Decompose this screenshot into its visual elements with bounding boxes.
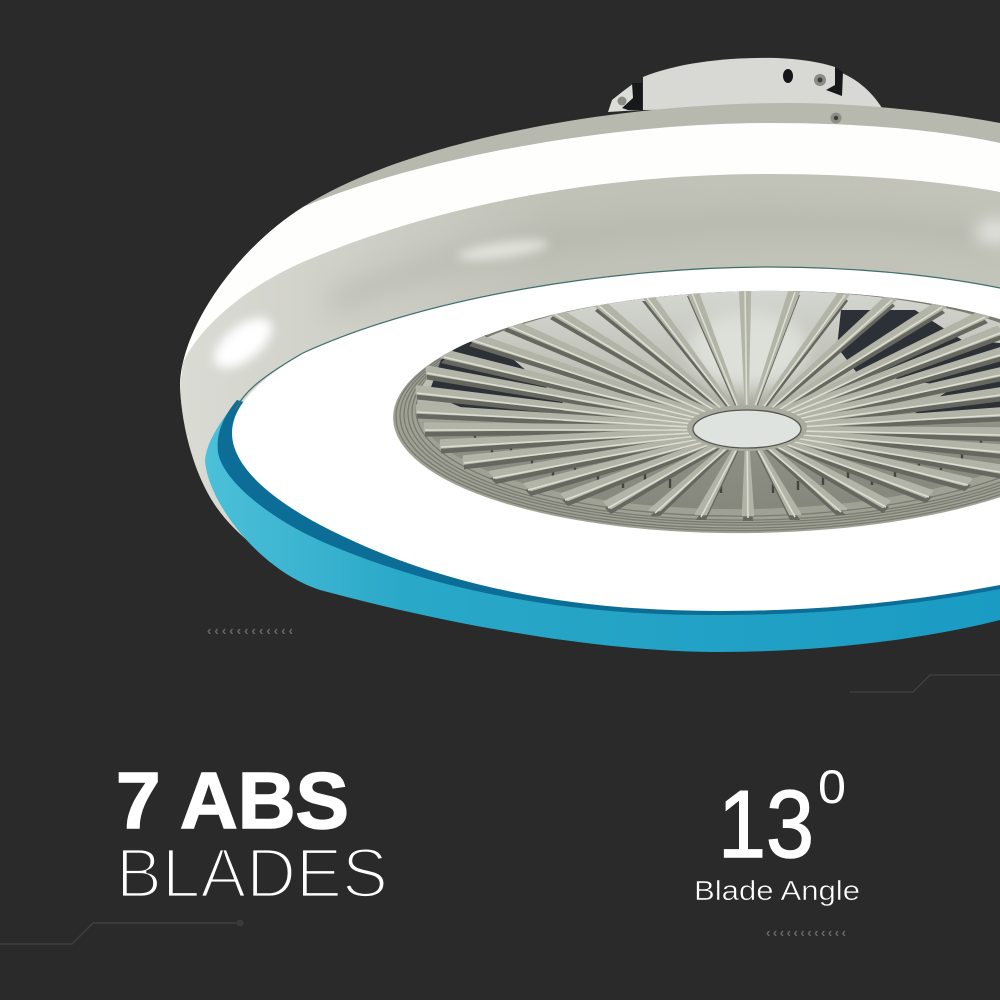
body shading — [336, 254, 459, 307]
dark blue inner recess — [218, 400, 1000, 615]
body highlights — [206, 218, 1000, 377]
blue lower trim — [205, 400, 1000, 652]
heading: 7 ABS: 7 ABS — [116, 756, 349, 845]
degree symbol: 0 — [818, 760, 846, 813]
decorative circuit line: right — [850, 675, 1000, 692]
caption: Blade Angle: Blade Angle — [694, 875, 860, 906]
fan body — [180, 103, 1000, 652]
blades — [417, 287, 1000, 515]
teal edge line — [235, 267, 1000, 410]
ceiling mount plate — [608, 58, 882, 112]
central hub — [687, 405, 807, 451]
grey body surface — [180, 174, 1000, 575]
motor reflection — [688, 312, 808, 388]
grille base with concentric rings — [390, 285, 1000, 537]
decorative circuit line: left — [0, 920, 244, 944]
cavity — [415, 285, 1000, 515]
chevrons: upper left: ‹‹‹‹‹‹‹‹‹‹‹‹ — [207, 623, 293, 638]
blade shadows — [417, 293, 1000, 521]
blade highlights — [417, 290, 1000, 518]
outer top rim — [180, 103, 1000, 575]
dark patch: right — [837, 310, 1000, 417]
angle value: 13: 13 — [718, 771, 814, 878]
heading: BLADES: BLADES — [116, 834, 388, 912]
support pins — [475, 432, 981, 493]
fan grille — [390, 285, 1000, 537]
upper white light band — [180, 123, 1000, 400]
chevrons: lower right: ‹‹‹‹‹‹‹‹‹‹‹‹ — [766, 925, 846, 940]
dark patch: left — [431, 333, 563, 422]
inner white light ring — [232, 267, 1000, 611]
rim screw — [830, 112, 842, 124]
